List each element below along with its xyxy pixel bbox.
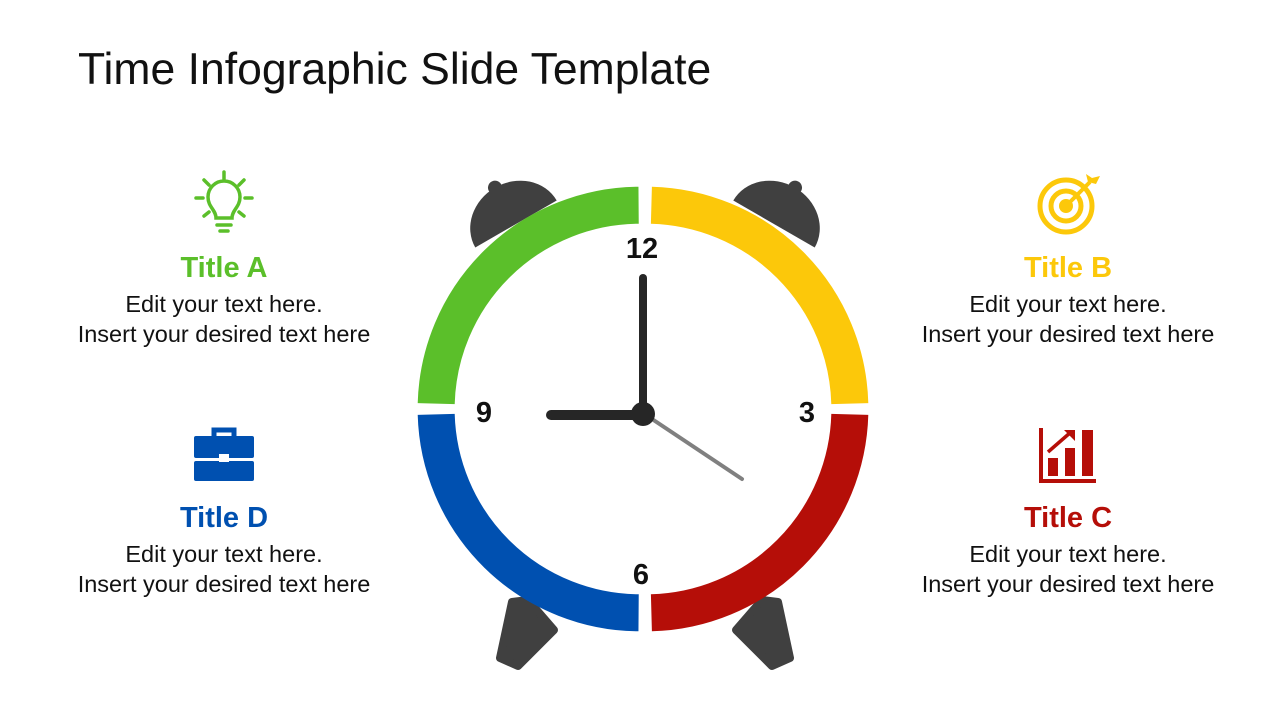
- panel: Title D: Title D: [180, 502, 268, 534]
- panel: Title C: Edit your text here.: [969, 541, 1167, 567]
- panel: Title D: Edit your text here.: [125, 541, 323, 567]
- numbers: 12: [626, 233, 658, 265]
- icon: lightbulb: [194, 170, 254, 233]
- panel: Title A: Title A: [180, 252, 268, 284]
- panel: Title D: [78, 428, 370, 597]
- ring segments: [436, 205, 850, 613]
- panel: Title B: Title B: [1024, 252, 1112, 284]
- icon: bar chart: [1039, 428, 1096, 483]
- icon: target: [1038, 174, 1100, 234]
- panel: Title B: Insert your desired text here: [922, 321, 1214, 347]
- hands: [551, 278, 742, 479]
- panel: Title A: Edit your text here.: [125, 291, 323, 317]
- title: Time Infographic Slide Template: [78, 45, 711, 94]
- panel: Title B: [922, 174, 1214, 347]
- panel: Title C: Title C: [1024, 502, 1112, 534]
- clock face: [455, 219, 835, 599]
- numbers: [476, 233, 815, 591]
- panel: Title A: [78, 170, 370, 347]
- icon: right leg: [736, 600, 790, 666]
- icon: left bell: [451, 158, 557, 248]
- numbers: 6: [633, 559, 649, 591]
- panel: Title C: [922, 428, 1214, 597]
- icon: briefcase: [194, 428, 254, 481]
- icon: left leg: [500, 600, 554, 666]
- panel: Title B: Edit your text here.: [969, 291, 1167, 317]
- panel: Title A: Insert your desired text here: [78, 321, 370, 347]
- icon: right bell: [733, 158, 839, 248]
- numbers: 3: [799, 397, 815, 429]
- panel: Title C: Insert your desired text here: [922, 571, 1214, 597]
- numbers: 9: [476, 397, 492, 429]
- panel: Title D: Insert your desired text here: [78, 571, 370, 597]
